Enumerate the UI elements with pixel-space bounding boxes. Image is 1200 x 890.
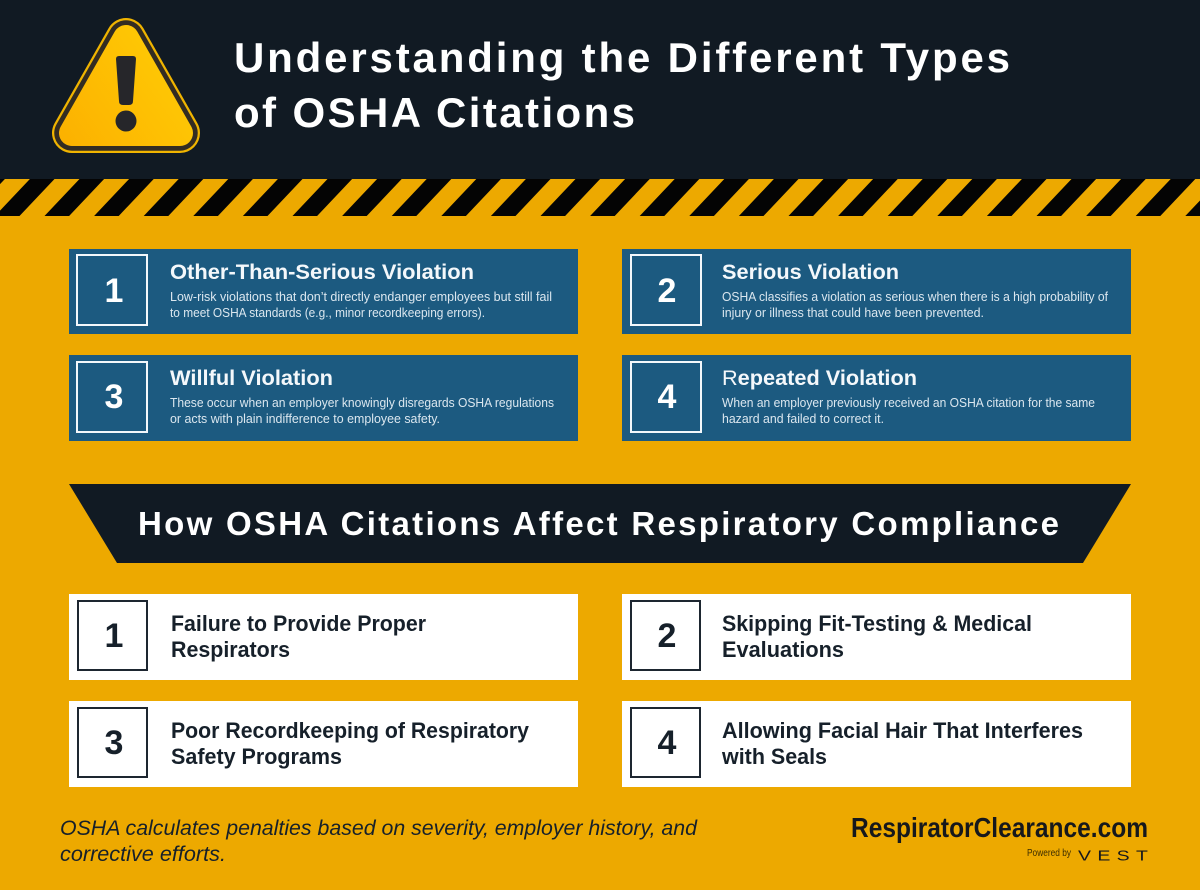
panel: repeated violation: Repeated Violation [722, 367, 917, 390]
panel: willful violation: Willful Violation [170, 367, 333, 390]
panel: serious violation: OSHA classifies a violation as serious when there is a high probability of [722, 290, 1108, 304]
panel: skipping fit-testing: 2 [658, 617, 676, 655]
panel: failure to provide respirators: Respirators [171, 637, 290, 662]
hazard stripes [0, 179, 1200, 216]
title [234, 34, 1010, 136]
panel: repeated violation: hazard and failed to correct it. [722, 412, 884, 426]
header band [0, 0, 1200, 179]
panel: poor recordkeeping [69, 701, 578, 787]
panel: poor recordkeeping: Safety Programs [171, 744, 342, 769]
logo: VEST [1078, 847, 1148, 864]
logo: RespiratorClearance.com [851, 812, 1148, 843]
title: Understanding the Different Types [234, 34, 1010, 81]
panel: poor recordkeeping: Poor Recordkeeping of Respiratory [171, 718, 530, 743]
panel: willful violation: These occur when an employer knowingly disregards OSHA regulations [170, 396, 554, 410]
panel: facial hair: with Seals [721, 744, 827, 769]
section banner [69, 484, 1131, 563]
panel: facial hair: 4 [658, 724, 677, 762]
panel: serious violation: Serious Violation [722, 261, 899, 284]
logo [851, 812, 1148, 864]
panel: repeated violation: When an employer previously received an OSHA citation for the same [722, 396, 1095, 410]
panel: failure to provide respirators: 1 [105, 617, 123, 655]
panel: skipping fit-testing: Skipping Fit-Testing & Medical [722, 611, 1032, 636]
footer note: corrective efforts. [60, 843, 226, 866]
panel: failure to provide respirators [69, 594, 578, 680]
logo: Powered by [1027, 847, 1072, 859]
footer note: OSHA calculates penalties based on severity, employer history, and [60, 817, 698, 840]
panel: serious violation [622, 249, 1131, 334]
section banner: How OSHA Citations Affect Respiratory Compliance [138, 505, 1059, 542]
panel: other-than-serious violation: Other-Than-Serious Violation [170, 261, 474, 284]
panel: serious violation: 2 [658, 272, 676, 310]
icon: warning triangle [72, 38, 180, 133]
panel: willful violation [69, 355, 578, 441]
panel: poor recordkeeping: 3 [105, 724, 123, 762]
panel: willful violation: or acts with plain indifference to employee safety. [170, 412, 440, 426]
panel: serious violation: injury or illness that could have been prevented. [722, 306, 984, 320]
panel: skipping fit-testing [622, 594, 1131, 680]
panel: facial hair: Allowing Facial Hair That Interferes [722, 718, 1083, 743]
panel: other-than-serious violation: to meet OSHA standards (e.g., minor recordkeeping errors). [170, 306, 485, 320]
panel: other-than-serious violation [69, 249, 578, 334]
footer note [60, 817, 698, 866]
panel: repeated violation [622, 355, 1131, 441]
title: of OSHA Citations [234, 89, 635, 136]
panel: skipping fit-testing: Evaluations [722, 637, 844, 662]
panel: facial hair [622, 701, 1131, 787]
panel: other-than-serious violation: Low-risk violations that don’t directly endanger employees but still fail [170, 290, 552, 304]
panel: willful violation: 3 [105, 378, 123, 416]
panel: failure to provide respirators: Failure to Provide Proper [171, 611, 426, 636]
panel: other-than-serious violation: 1 [105, 272, 123, 310]
panel: repeated violation: 4 [658, 378, 677, 416]
